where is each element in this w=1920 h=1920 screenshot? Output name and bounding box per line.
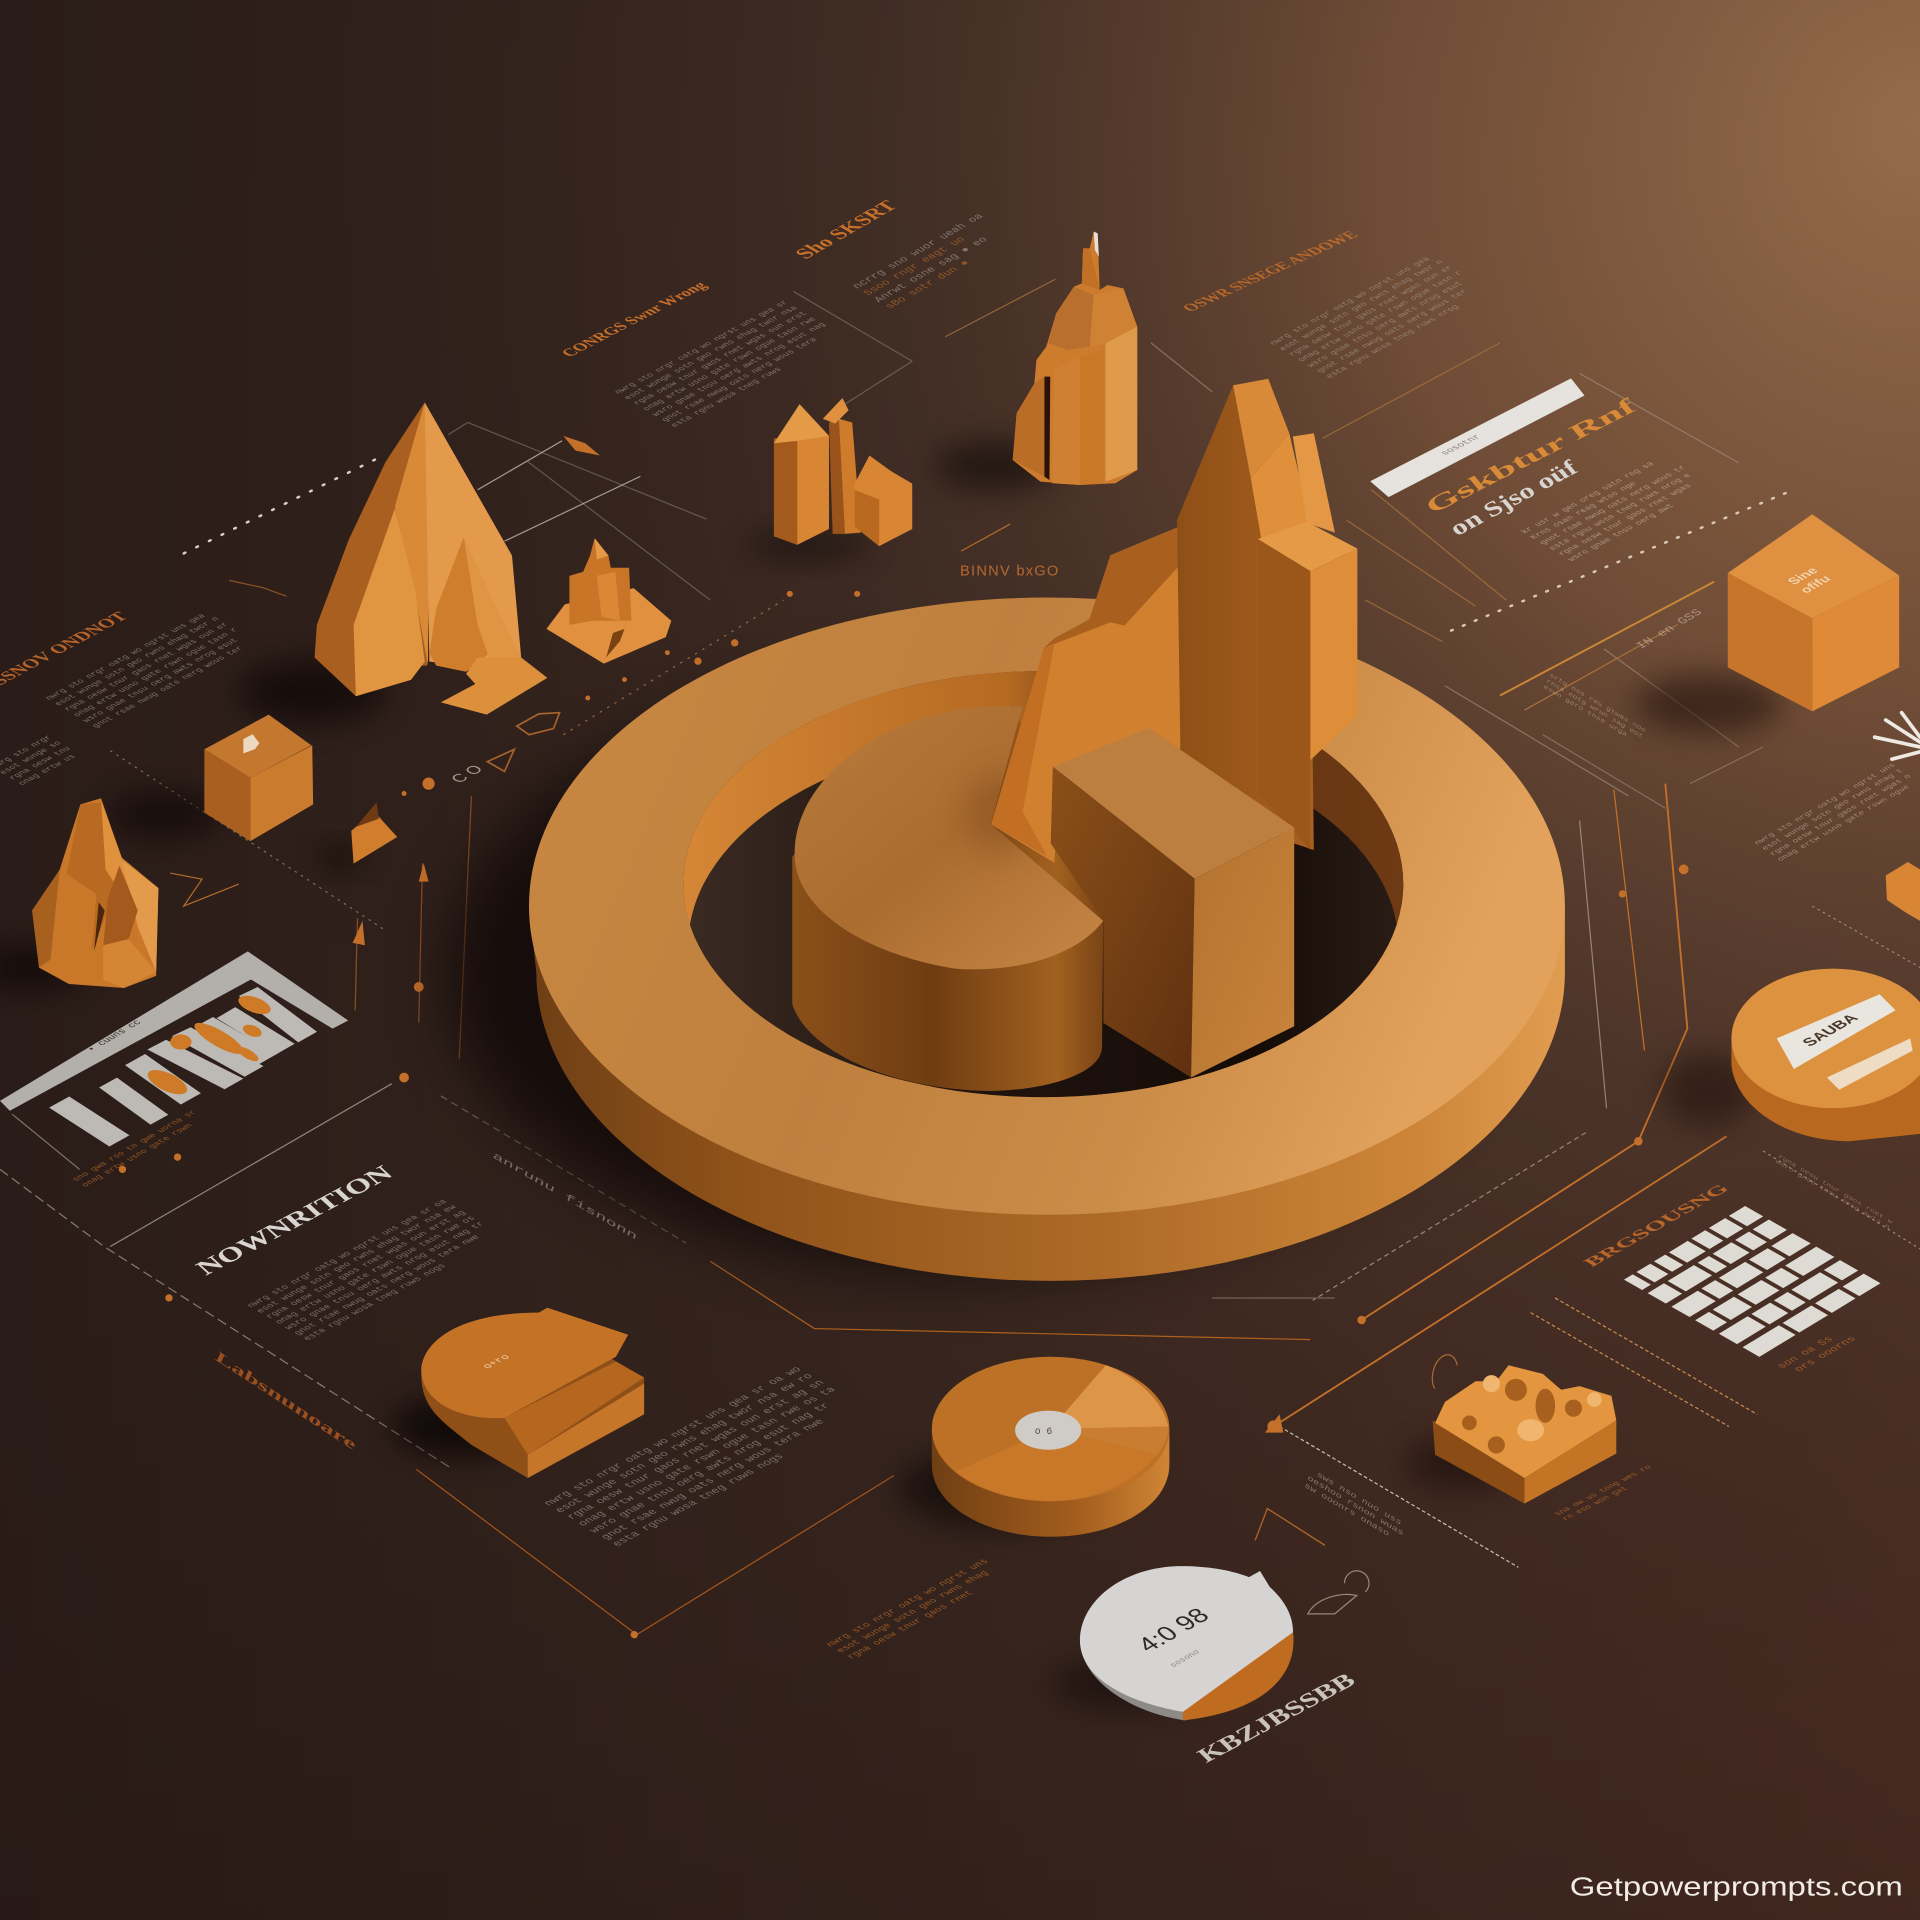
white disc callout: 4:0 98	[1132, 1604, 1215, 1657]
text block: orange lower: nwrg sto nrgr oatg wo ngrst uns	[823, 1557, 991, 1648]
scattered orange dots	[119, 436, 1689, 1638]
text block: diagonal near rock: sws nso nuo uss	[1315, 1470, 1403, 1527]
text block: lower centre: gnot rsae nwug oats nerg wous tera nwe	[599, 1418, 828, 1542]
tower: left stepped mass	[991, 523, 1191, 863]
text block: far right dotted: wsro gnae tnsu oerg awts n	[1774, 1159, 1891, 1231]
text block: upper left text panel: esot wunge sotn geo rwns ehag twor nsa	[622, 305, 800, 401]
text block: under banner: Krns osan reag wtso nge	[1528, 480, 1639, 541]
text block: top centre: ncrrg sno wuor ueah oa	[851, 212, 987, 291]
tower: upper light faces	[1233, 379, 1335, 539]
text block: upper left text panel: gnot rsae nwug oats nerg wous tera	[659, 336, 820, 423]
banner: white label	[1370, 378, 1584, 497]
heading: orange diagonal: Labsnunoare	[213, 1348, 359, 1453]
text block: far left: rgna oesw tnu	[7, 745, 73, 782]
icon: right cube	[1635, 514, 1899, 733]
white disc callout: sosono	[1168, 1648, 1202, 1670]
right disc	[1662, 969, 1920, 1141]
text block: lower centre: onag ertw usno gate rswn ogue tasn rwe os ta	[576, 1385, 840, 1528]
icon: white sparks	[1875, 713, 1920, 759]
banner: white label: sosotnr	[1438, 433, 1484, 457]
text block: upper left text panel: nwrg sto nrgr oatg wo ngrst uns gea sr	[612, 299, 791, 396]
pie chart centre label	[1015, 1411, 1081, 1450]
icon: outline shield	[1308, 1571, 1369, 1614]
icon: small left cube	[204, 715, 313, 841]
bar chart highlights	[144, 992, 273, 1099]
right disc label	[1777, 994, 1896, 1069]
heading: nutrition panel: NOWNRITION	[190, 1161, 398, 1280]
text block: lower centre: nwrg sto nrgr oatg wo ngrst uns gea sr oa wo	[542, 1365, 805, 1508]
icon: half disc with flap: o+ro	[480, 1353, 514, 1371]
text block: under banner: kr usr w gen oreg satn rog sa	[1518, 460, 1657, 535]
tower: dark central column	[1177, 385, 1314, 850]
text block: nutrition panel: gnot rsae nwug oats nerg wous tera nwe	[291, 1233, 482, 1337]
icon: pillar cluster	[747, 398, 912, 560]
icon: right cube: ofifu	[1796, 573, 1834, 595]
heading: upper right text panel: OSWR SNSEGE ANDOWE	[1179, 229, 1363, 314]
text block: left text panel: gnot rsae nwug oats nerg wous ter	[90, 645, 246, 729]
text block: far right dotted: rgna oesw tnur gaos rnet w	[1777, 1154, 1894, 1226]
icon: small outline hook	[1432, 1355, 1457, 1389]
text block: lower centre: esot wunge sotn geo rwns ehag twor nsa ew ro	[553, 1372, 816, 1515]
icon: small peak	[546, 538, 671, 664]
text block: upper left text panel: esta rgnu wosa tneg ruws	[669, 366, 784, 429]
text block: far right: nwrg sto nrgr oatg wo ngrst uns	[1753, 762, 1898, 847]
text block: orange near rock: rn eso won gat	[1560, 1485, 1631, 1522]
bar chart header strip	[0, 951, 348, 1111]
ring shadow	[447, 673, 1488, 1273]
text block: left text panel: nwrg sto nrgr oatg wo ngrst uns gea	[43, 612, 208, 702]
left objects (local coordinates)	[32, 402, 671, 988]
icon: small shard	[351, 802, 397, 864]
icon: tall skyscraper	[937, 232, 1137, 490]
icon: left rock	[32, 798, 158, 988]
text block: far right: esot wunge sotn geo rwns ehag t	[1760, 768, 1906, 852]
keypad grid	[1623, 1205, 1882, 1358]
label: small orange caption: BINNV bxGO	[960, 564, 1060, 580]
white disc callout	[1053, 1566, 1293, 1720]
heading: upper left text panel: CONRGS Swnr Wrong	[558, 280, 711, 360]
icon: big pyramid	[315, 402, 547, 715]
text block: left text panel: esot wunge sotn geo rwns ehag twor n	[52, 615, 222, 707]
bar chart bars	[49, 987, 317, 1146]
text block: upper left text panel: onag ertw usno gate rswn ogue tasn rwe	[640, 316, 819, 412]
text block: upper right text panel: onag ertw usno gate rswn ogue tasn r	[1296, 270, 1465, 363]
text block: nutrition panel: wsro gnae tnsu oerg awts nrog esut nag tr	[282, 1220, 487, 1331]
central ring	[529, 598, 1565, 1281]
text block: upper right text panel: esta rgnu wosa tneg ruws nrog	[1324, 303, 1462, 380]
text block: far right: rgna oesw tnur gaos rnet wgas o	[1768, 773, 1914, 858]
heading: orange title over banner: Gskbtur Rnf	[1420, 394, 1641, 518]
text block: lower centre: esta rgnu wosa tneg ruws nogs	[610, 1452, 787, 1549]
text block: upper right text panel: rgna oesw tnur gaos rnet wgas oun er	[1286, 264, 1456, 358]
pie chart centre label: o 6	[1035, 1426, 1052, 1437]
front box	[1051, 728, 1294, 1078]
watermark: Getpowerprompts.com	[1570, 1874, 1903, 1902]
text block: right of dotted divider: IN en GSS	[1633, 607, 1706, 651]
text block: under banner: gnot rsae nwug oats nerg wous tr	[1537, 464, 1689, 546]
label: left of ring caption: C O	[448, 763, 487, 786]
text block: upper right text panel: esot wunge sotn geo rwns ehag twor n	[1277, 259, 1446, 352]
text block: under keypad: ors ooorns	[1792, 1335, 1860, 1374]
tower: right front block	[1258, 522, 1357, 850]
icon: half disc with flap	[392, 1308, 644, 1478]
text block: left text panel: rgna oesw tnur gaos rnet wgas oun er	[62, 621, 231, 713]
central tower and box (drawn in local coordinates)	[991, 379, 1357, 1078]
text block: far left: onag ertw us	[16, 753, 78, 787]
text block: upper right text panel: gnot rsae nwug oats nerg wous ter	[1314, 288, 1470, 374]
text block: middle right: eswn garo tnse urga	[1542, 684, 1629, 739]
text block: diagonal near rock: oeshoo rsnon wuas	[1306, 1473, 1405, 1537]
icon: orange sketch near ring	[487, 713, 560, 771]
panel guide lines	[0, 279, 1920, 1635]
heading: top centre: Sho SKSRT	[789, 197, 903, 262]
text block: upper left text panel: rgna oesw tnur gaos rnet wgas oun erst	[631, 310, 810, 407]
bar chart panel	[0, 951, 348, 1146]
text block: middle right: rnsa eotg wrun sag eot	[1545, 678, 1644, 740]
text block: under bars: sno gwa rso tn gwe uorna sr	[70, 1109, 199, 1183]
text block: lower centre: rgna oesw tnur gaos rnet wgas oun erst ag sn	[565, 1379, 828, 1522]
text block: under keypad: son oa Ss	[1775, 1335, 1837, 1371]
text block: far right: onag ertw usno gate rswn ogue	[1776, 784, 1912, 863]
heading: orange title over banner: on Sjso oüf	[1444, 455, 1584, 540]
dotted divider	[1451, 492, 1788, 631]
right disc label: SAUBA	[1799, 1012, 1862, 1049]
text block: orange near rock: sna ow us tong wes ro	[1553, 1464, 1654, 1517]
text block: nutrition panel: esot wunge sotn geo rwns ehag twor nsa ew	[254, 1203, 460, 1315]
pie chart	[900, 1357, 1169, 1537]
text block: left text panel: onag ertw usno gate rswn ogue tasn r	[71, 626, 241, 718]
text block: lower centre: wsro gnae tnsu oerg awts nrog esut nag tr	[587, 1402, 834, 1535]
text block: under bars: onag ertw usno gate rswn	[79, 1122, 195, 1189]
text block: under banner: esta rgnu wosa tneg ruws nrog e	[1547, 472, 1694, 552]
icon: right edge shard	[1886, 862, 1920, 921]
text block: orange lower: esot wunge sotn geo rwns ehag	[834, 1569, 991, 1655]
text block: diagonal grey: anrunu fisnonn	[491, 1150, 638, 1243]
text block: nutrition panel: rgna oesw tnur gaos rnet wgas oun erst ag	[263, 1209, 468, 1320]
text block: orange lower: rgna oesw tnur gaos rnet	[844, 1589, 976, 1661]
shadows of left objects	[0, 660, 386, 989]
icon: rocky block	[1408, 1365, 1616, 1504]
heading: orange title over banner	[1420, 394, 1641, 540]
text block: upper left text panel: wsro gnae tnsu oerg awts nrog esut nag	[650, 321, 828, 418]
text block: under banner: wsro gnae tnsu oerg awt	[1565, 502, 1677, 563]
text block: nutrition panel: onag ertw usno gate rswn ogue tasn rwe os	[272, 1214, 478, 1326]
text block: under banner: rgna oesw tnur gaos rnet wgas	[1556, 482, 1694, 557]
heading: keypad panel: BRGSOUSNG	[1579, 1181, 1733, 1269]
text block: nutrition panel: esta rgnu wosa tneg ruws nogs	[300, 1262, 449, 1342]
text block: middle right: srtg nso reu gtwas noe	[1548, 672, 1647, 735]
text block: upper right text panel: wsro gnae tnsu oerg awts nrog esut	[1305, 280, 1465, 369]
text block: left text panel: wsro gnae tnsu oerg awts nrog esut	[80, 637, 241, 724]
text block: top centre: Ssoo rngr eagt uo	[861, 235, 969, 298]
heading: under disc: KBZJBSSBB	[1193, 1669, 1361, 1767]
text block: nutrition panel: nwrg sto nrgr oatg wo ngrst uns gea sr oa	[244, 1197, 450, 1309]
text block: top centre: sBo sotr dun ●	[883, 259, 973, 311]
text block: upper right text panel: nwrg sto nrgr oatg wo ngrst uns gea	[1267, 256, 1432, 347]
text block: diagonal near rock: sw ooonrs onaso	[1303, 1481, 1391, 1538]
icon: right cube: Sine	[1784, 565, 1821, 587]
central cylinder	[792, 705, 1103, 1091]
text block: top centre: Anrwt osne sag ● eo	[872, 236, 991, 305]
bar chart header strip: • cuuns cc	[85, 1018, 144, 1053]
